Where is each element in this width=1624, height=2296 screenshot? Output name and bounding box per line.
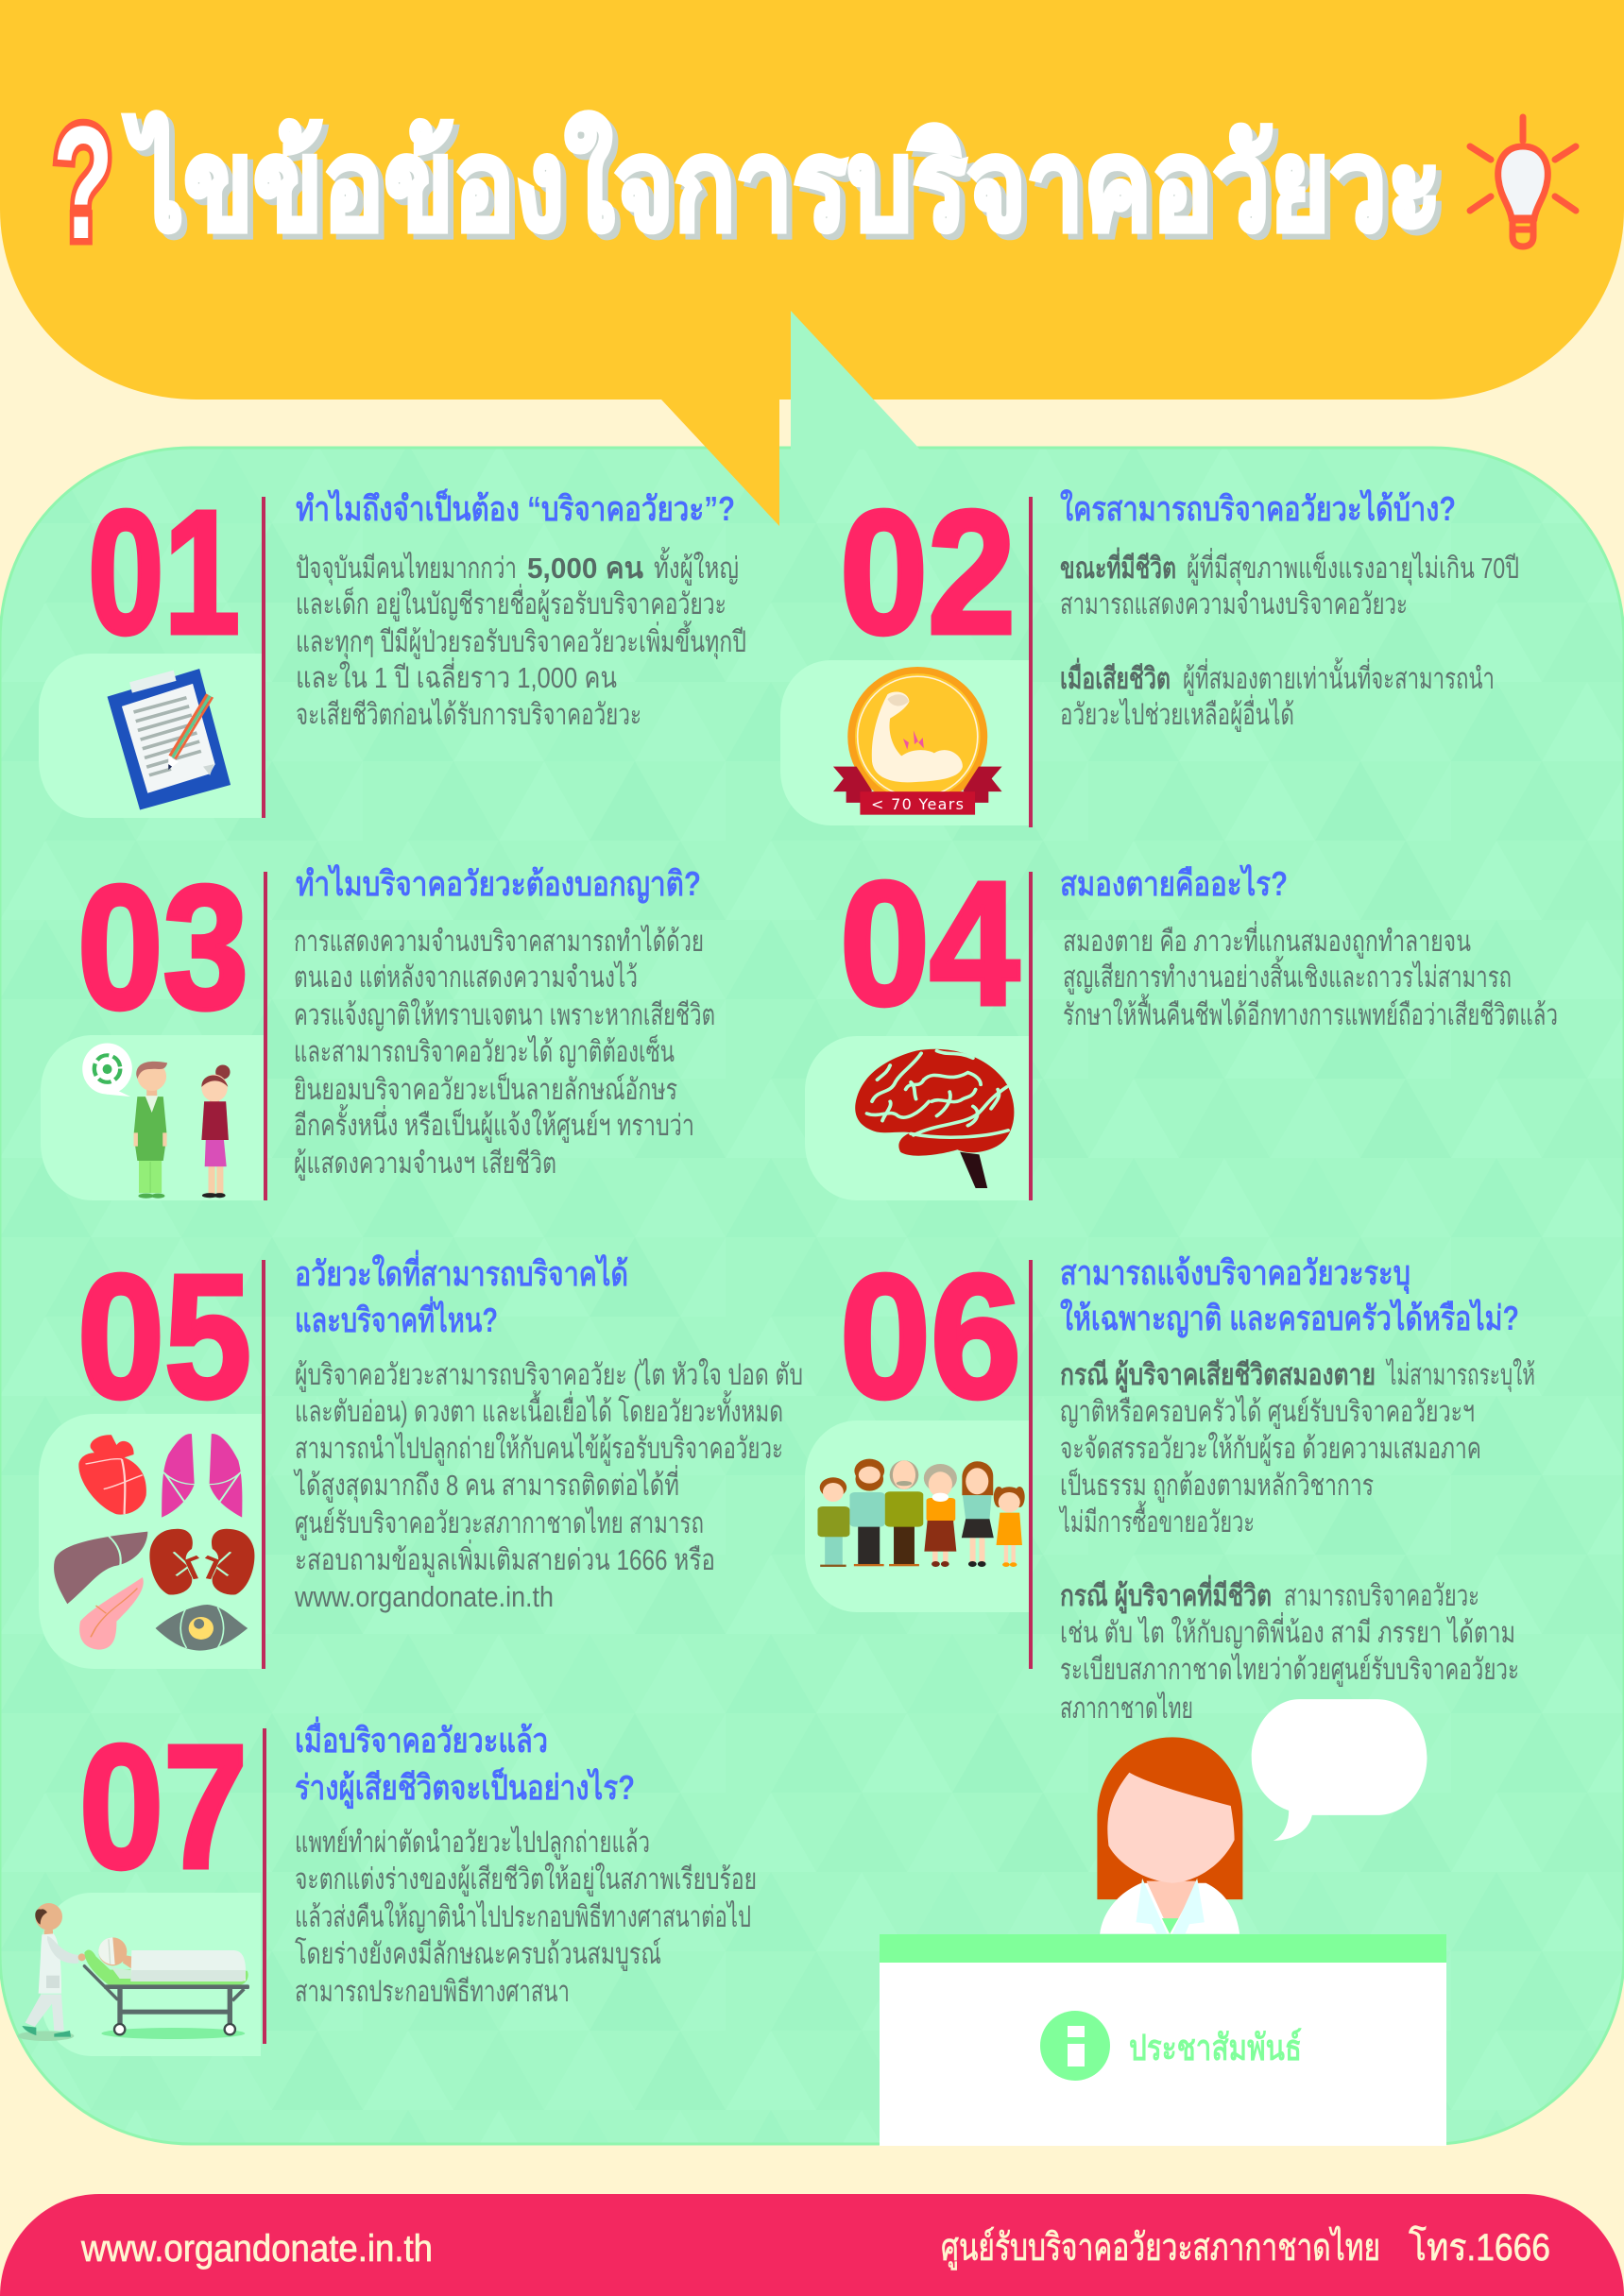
section 01 [39, 475, 746, 818]
green bubble tail [791, 311, 920, 450]
body 03: และสามารถบริจาคอวัยวะได้ ญาติต้องเซ็น [294, 1034, 675, 1068]
icon: information [1040, 2011, 1110, 2081]
icon: man and woman talking [82, 1043, 231, 1199]
heading 06: ให้เฉพาะญาติ และครอบครัวได้หรือไม่? [1060, 1298, 1519, 1338]
body 01: ทั้งผู้ใหญ่ [654, 547, 739, 586]
kidneys [149, 1529, 254, 1595]
icon: nurse with stretcher [17, 1903, 249, 2041]
body 05: ศูนย์รับบริจาคอวัยวะสภากาชาดไทย สามารถ [295, 1506, 704, 1540]
bearded man [849, 1459, 885, 1566]
body 02: ผู้ที่มีสุขภาพแข็งแรงอายุไม่เกิน 70ปี [1187, 548, 1519, 587]
pancreas [79, 1577, 144, 1650]
body 07: จะตกแต่งร่างของผู้เสียชีวิตให้อยู่ในสภาพเรียบร้อย [295, 1862, 757, 1896]
image tile 02 [780, 660, 1029, 825]
footer website: www.organdonate.in.th [80, 2228, 433, 2270]
body 02: อวัยวะไปช่วยเหลือผู้อื่นได้ [1060, 694, 1294, 732]
section 03 [41, 850, 715, 1200]
body 01: จะเสียชีวิตก่อนได้รับการบริจาคอวัยวะ [296, 698, 641, 731]
woman at desk [1097, 1737, 1242, 1934]
section 06 [805, 1239, 1535, 1725]
badge label: < 70 Years [871, 795, 964, 813]
icon: light bulb [1470, 117, 1576, 247]
body 06: เป็นธรรม ถูกต้องตามหลักวิชาการ [1060, 1468, 1374, 1503]
body 05: ได้สูงสุดมากถึง 8 คน สามารถติดต่อได้ที่ [293, 1465, 679, 1504]
body 01: และใน 1 ปี เฉลี่ยราว 1,000 คน [296, 657, 617, 694]
body 02 [1060, 547, 1519, 732]
heading 05: อวัยวะใดที่สามารถบริจาคได้ [295, 1250, 628, 1293]
heading 04: สมองตายคืออะไร? [1060, 863, 1288, 903]
section 05 [39, 1239, 803, 1669]
body 01 [296, 547, 746, 731]
image tile 01 [39, 654, 262, 818]
icon: organs [54, 1434, 254, 1651]
body 01: และทุกๆ ปีมีผู้ป่วยรอรับบริจาคอวัยวะเพิ่มขึ้นทุกปี [296, 621, 746, 660]
body 05: และตับอ่อน) ดวงตา และเนื้อเยื่อได้ โดยอวัยวะทั้งหมด [295, 1390, 783, 1428]
number 03: 03 [77, 850, 248, 1046]
icon: question mark: ? [53, 94, 113, 273]
heading 05: และบริจาคที่ไหน? [295, 1296, 498, 1339]
icon: clipboard [108, 669, 231, 810]
body 03: อีกครั้งหนึ่ง หรือเป็นผู้แจ้งให้ศูนย์ฯ ทราบว่า [294, 1104, 694, 1143]
image tile 03 [41, 1035, 264, 1200]
number 07: 07 [79, 1709, 248, 1905]
image tile 06 [805, 1420, 1029, 1612]
icon: strong arm medal [833, 671, 1002, 815]
section 07 [17, 1709, 757, 2056]
body 06: กรณี ผู้บริจาคเสียชีวิตสมองตาย [1060, 1358, 1376, 1393]
number 05: 05 [77, 1239, 251, 1435]
number 01: 01 [88, 475, 240, 671]
heading 01: ทำไมถึงจำเป็นต้อง “บริจาคอวัยวะ”? [296, 487, 735, 528]
body 06: สภากาชาดไทย [1060, 1692, 1193, 1725]
body 05 [293, 1358, 803, 1613]
heading 05 [295, 1250, 628, 1339]
body 03: การแสดงความจำนงบริจาคสามารถทำได้ด้วย [294, 925, 704, 958]
number 06: 06 [840, 1239, 1021, 1435]
lungs [162, 1434, 242, 1518]
heading 06: สามารถแจ้งบริจาคอวัยวะระบุ [1060, 1253, 1410, 1295]
speech bubble [1252, 1699, 1427, 1841]
body 03: ตนเอง แต่หลังจากแสดงความจำนงไว้ [294, 961, 638, 994]
body 03 [294, 925, 715, 1181]
body 05: ะสอบถามข้อมูลเพิ่มเติมสายด่วน 1666 หรือ [295, 1539, 715, 1577]
image tile 07 [41, 1893, 261, 2056]
body 06: ไม่สามารถระบุให้ [1385, 1358, 1535, 1393]
girl [994, 1487, 1025, 1567]
footer phone: โทร.1666 [1409, 2226, 1550, 2269]
icon: brain [855, 1049, 1014, 1188]
body 03: ควรแจ้งญาติให้ทราบเจตนา เพราะหากเสียชีวิต [294, 998, 715, 1031]
footer band [0, 2194, 1624, 2296]
body 07: โดยร่างยังคงมีลักษณะครบถ้วนสมบูรณ์ [295, 1937, 661, 1971]
body 06: จะจัดสรรอวัยวะให้กับผู้รอ ด้วยความเสมอภาค [1060, 1432, 1481, 1466]
body 06 [1058, 1358, 1535, 1725]
icon: family [817, 1459, 1025, 1567]
body 02: เมื่อเสียชีวิต [1060, 657, 1171, 695]
body 05: www.organdonate.in.th [294, 1580, 554, 1613]
reception desk [880, 1934, 1446, 2146]
eye [156, 1605, 248, 1651]
section 02 [780, 475, 1519, 827]
boy [817, 1477, 849, 1567]
body 01: และเด็ก อยู่ในบัญชีรายชื่อผู้รอรับบริจาคอวัยวะ [296, 584, 727, 621]
heading 02: ใครสามารถบริจาคอวัยวะได้บ้าง? [1060, 488, 1456, 528]
body 05: ผู้บริจาคอวัยวะสามารถบริจาคอวัยะ (ไต หัวใจ ปอด ตับ [295, 1358, 803, 1392]
body 07 [295, 1826, 757, 2008]
heading 06 [1060, 1253, 1519, 1338]
heading 03: ทำไมบริจาคอวัยวะต้องบอกญาติ? [296, 863, 701, 904]
panel: green content panel [0, 448, 1624, 2144]
body 06: สามารถบริจาคอวัยวะ [1284, 1579, 1479, 1612]
heading 07: ร่างผู้เสียชีวิตจะเป็นอย่างไร? [295, 1766, 635, 1810]
number 04: 04 [840, 846, 1019, 1042]
body 06: กรณี ผู้บริจาคที่มีชีวิต [1060, 1574, 1272, 1614]
receptionist illustration [880, 1699, 1446, 2146]
body 03: ผู้แสดงความจำนงฯ เสียชีวิต [294, 1147, 556, 1181]
body 01: ปัจจุบันมีคนไทยมากกว่า [296, 552, 517, 587]
old man [885, 1460, 923, 1566]
body 07: สามารถประกอบพิธีทางศาสนา [295, 1975, 570, 2008]
heading 07: เมื่อบริจาคอวัยวะแล้ว [295, 1716, 548, 1760]
desk label: ประชาสัมพันธ์ [1129, 2028, 1302, 2068]
number 02: 02 [840, 475, 1016, 671]
body 02: สามารถแสดงความจำนงบริจาคอวัยวะ [1060, 587, 1408, 621]
grandmother [924, 1464, 957, 1567]
body 07: แล้วส่งคืนให้ญาตินำไปประกอบพิธีทางศาสนาต่อไป [295, 1900, 751, 1933]
footer organisation: ศูนย์รับบริจาคอวัยวะสภากาชาดไทย [941, 2226, 1380, 2270]
body 07: แพทย์ทำผ่าตัดนำอวัยวะไปปลูกถ่ายแล้ว [295, 1826, 650, 1860]
body 02: ผู้ที่สมองตายเท่านั้นที่จะสามารถนำ [1183, 657, 1495, 696]
liver [54, 1532, 147, 1604]
body 03: ยินยอมบริจาคอวัยวะเป็นลายลักษณ์อักษร [294, 1072, 677, 1106]
body 04: สมองตาย คือ ภาวะที่แกนสมองถูกทำลายจน [1063, 921, 1471, 959]
heading 07 [295, 1716, 635, 1810]
section 04 [805, 846, 1558, 1200]
mother [962, 1461, 994, 1567]
body 05: สามารถนำไปปลูกถ่ายให้กับคนไข้ผู้รอรับบริจาคอวัยวะ [295, 1432, 783, 1466]
body 01: 5,000 คน [527, 552, 643, 585]
header speech bubble [0, 0, 1624, 526]
body 06: ญาติหรือครอบครัวได้ ศูนย์รับบริจาคอวัยวะฯ [1060, 1395, 1475, 1429]
body 06: ไม่มีการซื้อขายอวัยวะ [1058, 1501, 1255, 1539]
image tile 05 [39, 1414, 262, 1669]
body 04 [1063, 921, 1558, 1031]
heart [78, 1435, 146, 1515]
image tile 04 [805, 1036, 1029, 1200]
body 02: ขณะที่มีชีวิต [1060, 547, 1176, 585]
